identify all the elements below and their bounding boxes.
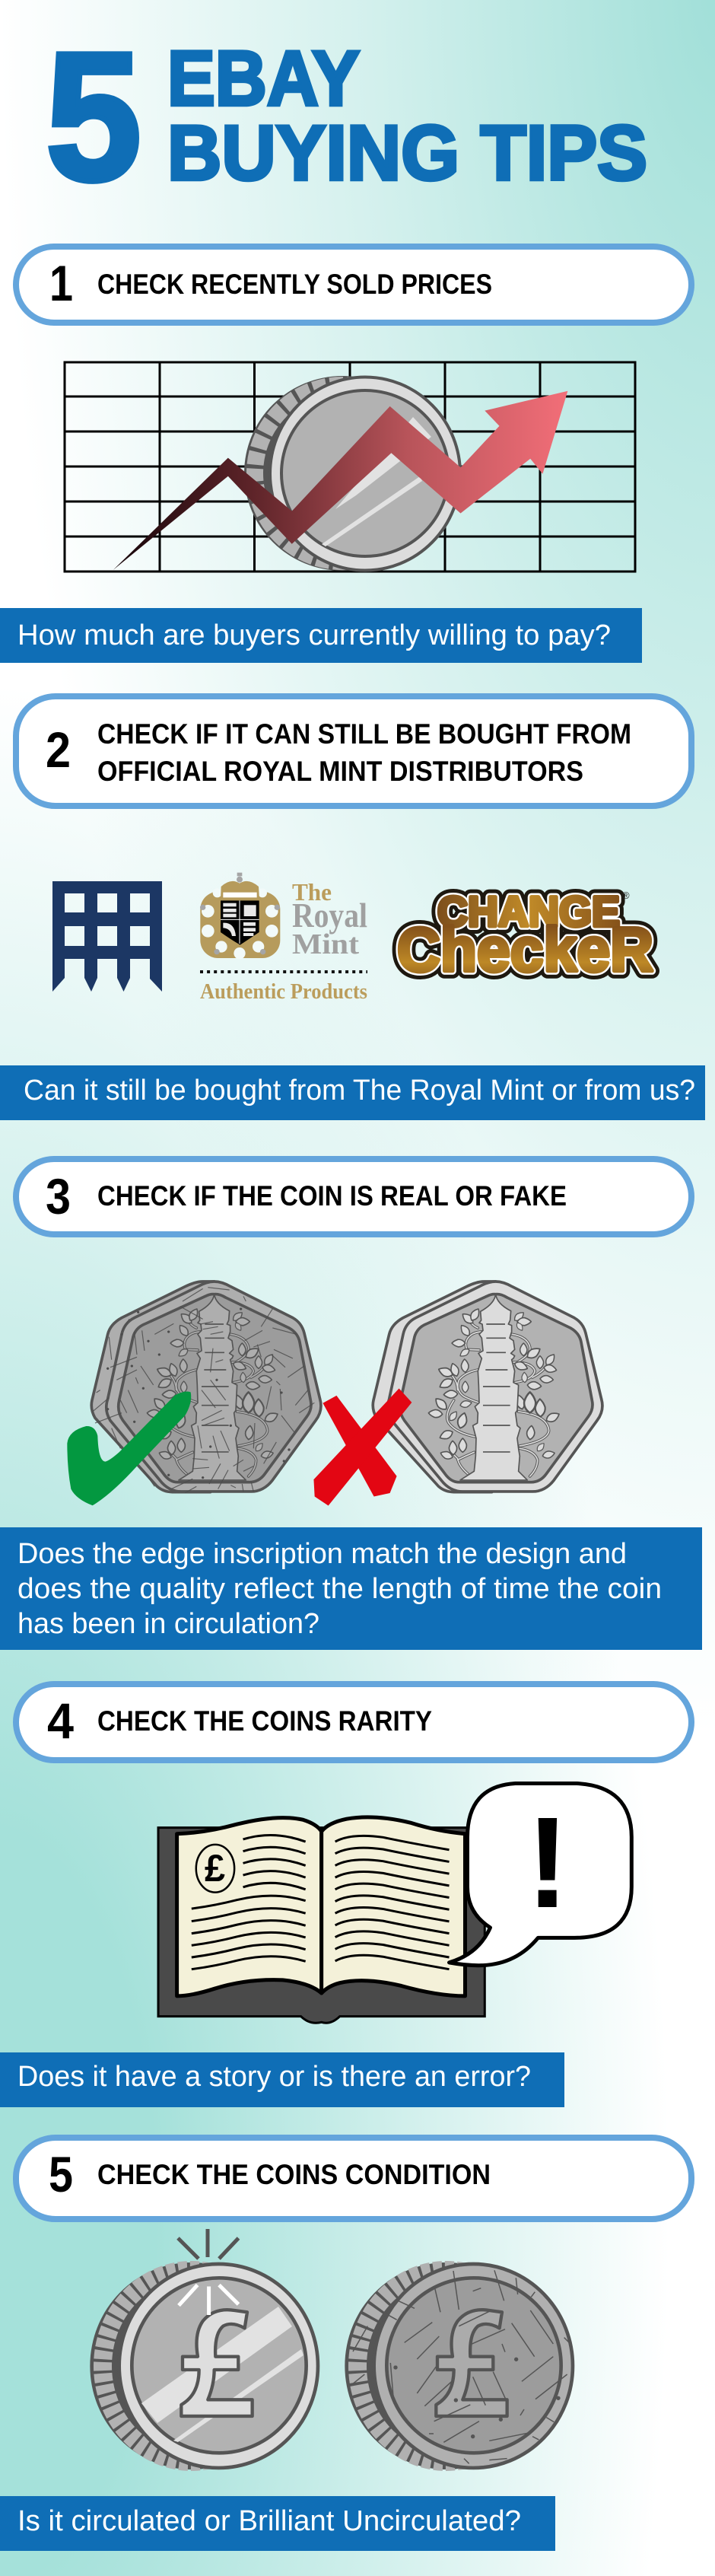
pound sign on book page: £ — [205, 1847, 225, 1890]
icon: speech bubble with exclamation — [450, 1784, 631, 1966]
panel: tip 1 heading — [16, 247, 691, 323]
icon: worn circulated pound coin — [345, 2262, 573, 2469]
title line: BUYING TIPS: BUYING TIPS — [167, 110, 647, 196]
callout: tip 5 question: Is it circulated or Brilliant Uncirculated? — [17, 2505, 521, 2537]
tip number 2: 2 — [46, 721, 71, 778]
heading text 5: CHECK THE COINS CONDITION — [97, 2159, 491, 2190]
callout: tip 1 question — [0, 608, 642, 663]
title numeral 5: 5 — [46, 14, 141, 218]
callout: tip 2 question: Can it still be bought from The Royal Mint or from us? — [24, 1075, 695, 1107]
icon: green tick — [67, 1392, 191, 1505]
logo: Change Checker: ® — [622, 890, 630, 901]
logo: The Royal Mint — [200, 873, 367, 1004]
callout: tip 3 question: does the quality reflect the length of time the coin — [17, 1573, 662, 1605]
logo: Change Checker: CheckeR — [397, 915, 653, 985]
icon: crisp fake 50p coin — [373, 1282, 602, 1492]
callout: tip 5 question — [0, 2496, 555, 2551]
panel: tip 3 heading — [16, 1159, 691, 1234]
crest — [200, 873, 280, 959]
logo: Change Checker: CHANGE — [437, 887, 620, 935]
icon: portcullis logo — [52, 881, 162, 992]
callout: tip 1 question: How much are buyers currently willing to pay? — [17, 619, 611, 651]
tip number 4: 4 — [47, 1692, 74, 1749]
logo: The Royal Mint: Royal — [292, 896, 367, 935]
icon: open book — [158, 1817, 485, 2023]
logo: Change Checker — [397, 887, 653, 985]
tip number 3: 3 — [46, 1168, 71, 1224]
logo: Change Checker: CheckeR — [397, 915, 653, 985]
logo: The Royal Mint: Mint — [292, 928, 359, 960]
callout: tip 4 question: Does it have a story or is there an error? — [17, 2061, 531, 2093]
icon: worn genuine 50p coin — [91, 1282, 321, 1493]
icon: brilliant uncirculated pound coin — [90, 2262, 318, 2469]
heading text 1: CHECK RECENTLY SOLD PRICES — [97, 269, 492, 300]
callout: tip 3 question: has been in circulation? — [17, 1608, 319, 1640]
callout: tip 4 question — [0, 2052, 564, 2107]
icon: speech bubble with exclamation: ! — [526, 1791, 569, 1935]
heading text 4: CHECK THE COINS RARITY — [97, 1705, 432, 1737]
callout: tip 3 question — [0, 1527, 702, 1650]
icon: shine marks above coin — [178, 2229, 239, 2259]
icon: red cross — [313, 1389, 412, 1506]
heading text 3: CHECK IF THE COIN IS REAL OR FAKE — [97, 1180, 567, 1212]
panel: tip 4 heading — [16, 1684, 691, 1760]
logo: The Royal Mint: Authentic Products — [200, 980, 367, 1004]
tip number 5: 5 — [49, 2146, 73, 2202]
callout: tip 2 question — [0, 1065, 705, 1120]
tip number 1: 1 — [49, 255, 73, 311]
icon: white sparkle on coin — [179, 2285, 239, 2315]
logo: Change Checker: CheckeR — [397, 915, 653, 985]
callout: tip 3 question: Does the edge inscription match the design and — [17, 1538, 627, 1570]
chart: rising price arrow over coin — [65, 362, 635, 572]
wordmark: The — [292, 878, 332, 906]
heading text 2: CHECK IF IT CAN STILL BE BOUGHT FROM — [97, 718, 631, 750]
panel: tip 2 heading — [16, 696, 691, 806]
logo: Change Checker: CHANGE — [437, 887, 620, 935]
arrow: upward trend — [113, 391, 567, 570]
icon: silver coin — [244, 376, 460, 571]
title line: EBAY: EBAY — [167, 35, 360, 122]
title — [46, 14, 647, 218]
panel: tip 5 heading — [16, 2138, 691, 2219]
panel: tip 2 heading: OFFICIAL ROYAL MINT DISTRIBUTORS — [97, 756, 583, 787]
logo: Change Checker: CHANGE — [437, 887, 620, 935]
